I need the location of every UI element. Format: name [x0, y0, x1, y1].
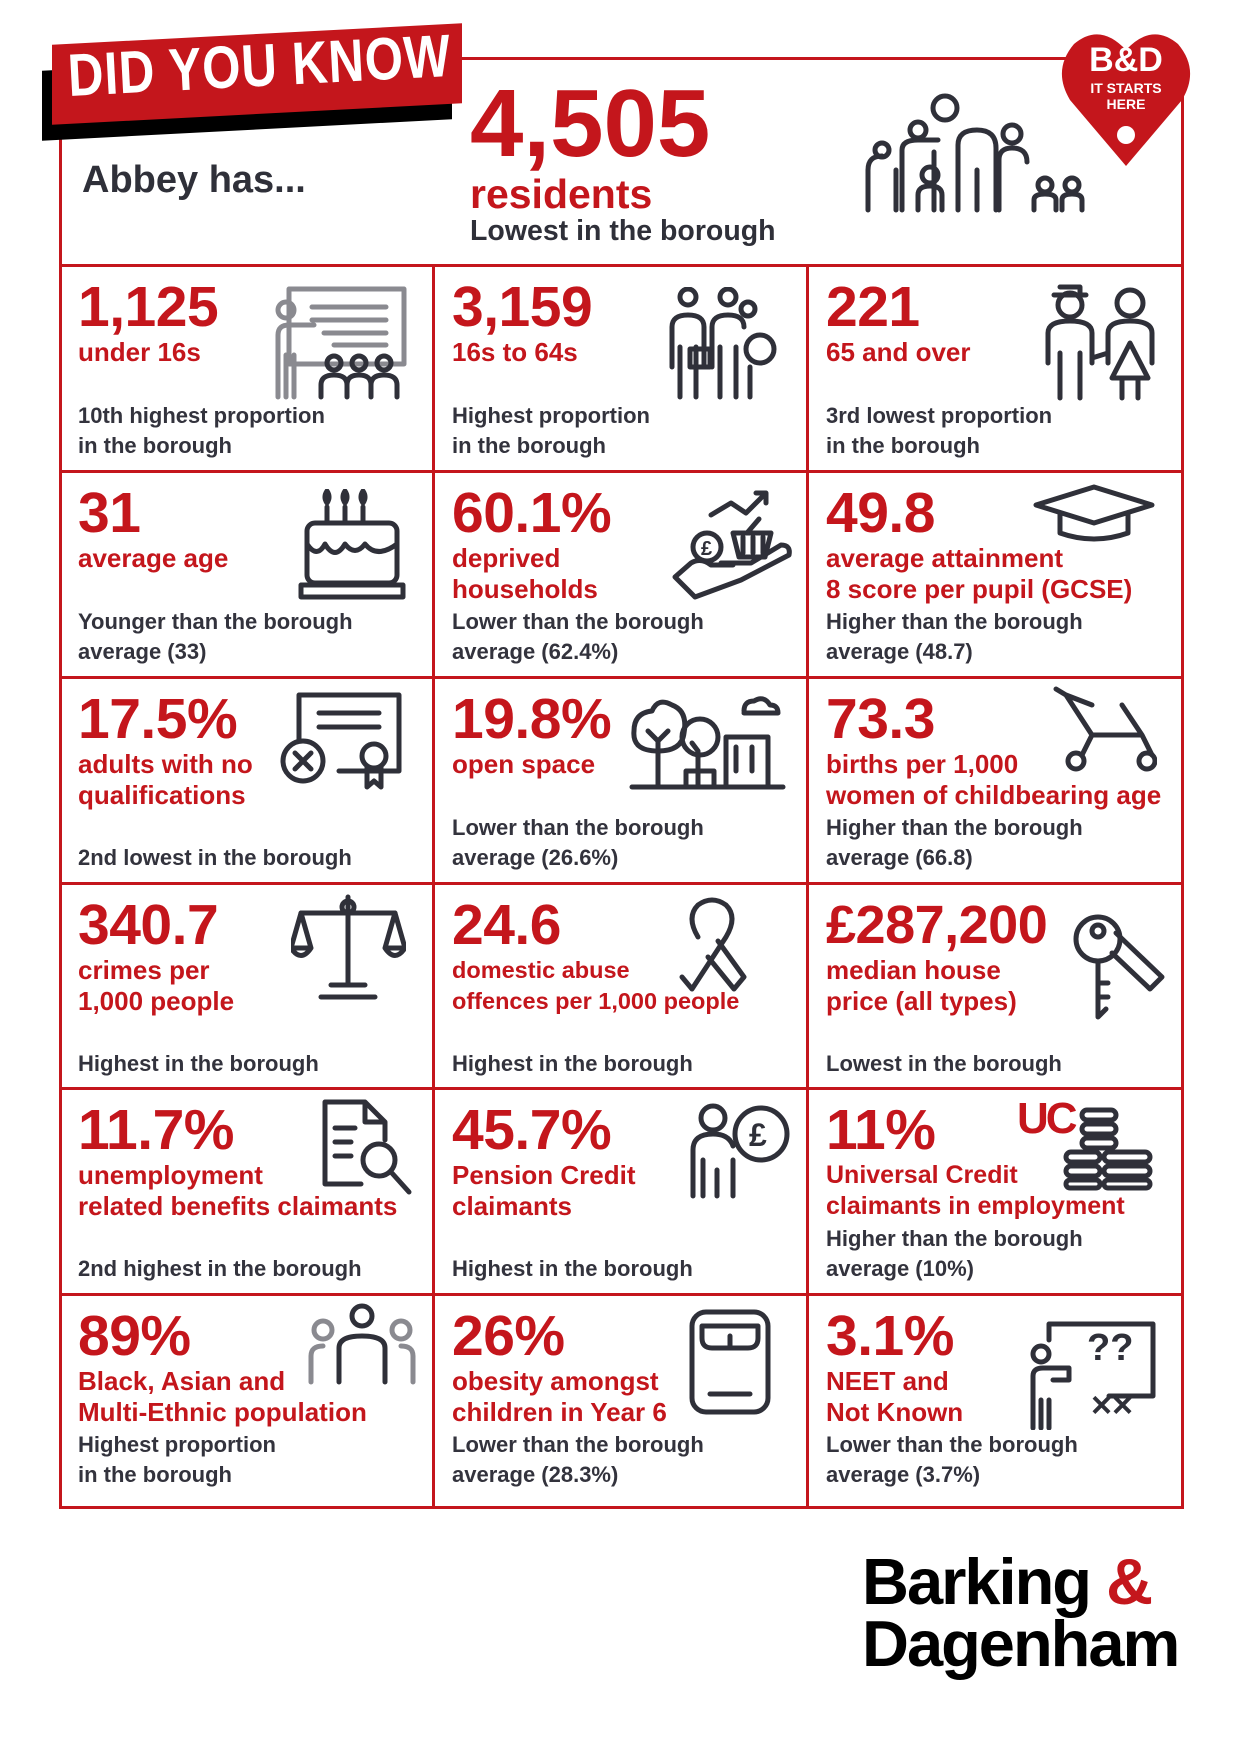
grid lines: [62, 264, 1181, 1506]
panel: domestic abuse: offences per 1,000 people: [452, 988, 739, 1014]
panel: average age: [78, 481, 406, 664]
panel: domestic abuse: [452, 893, 746, 1076]
panel: under 16s: 10th highest proportion: [78, 403, 325, 428]
icon: family group: [866, 94, 1084, 212]
panel: open space: 19.8%: [452, 687, 611, 751]
panel: under 16s: in the borough: [78, 433, 232, 458]
panel: 65 and over: in the borough: [826, 433, 980, 458]
panel: ethnic population: in the borough: [78, 1462, 232, 1487]
logo: B&D heart: HERE: [1107, 96, 1145, 112]
panel: 16s to 64s: 3,159: [452, 275, 592, 339]
panel: universal credit: claimants in employment: [826, 1192, 1125, 1220]
panel: open space: Lower than the borough: [452, 815, 704, 840]
panel: average age: average (33): [78, 639, 206, 664]
icon: hand with money basket: [672, 490, 792, 600]
panel: 16s to 64s: 16s to 64s: [452, 337, 578, 367]
icon: group of people: [308, 1304, 416, 1384]
panel: crimes: [78, 893, 406, 1076]
panel: child obesity: Lower than the borough: [452, 1432, 704, 1457]
panel: unemployment benefits: related benefits claimants: [78, 1191, 397, 1221]
icon: keys: [1074, 914, 1164, 1020]
logo: Barking & Dagenham: Dagenham: [862, 1607, 1178, 1680]
icon: birthday cake: [298, 489, 406, 600]
logo: B&D heart: IT STARTS: [1090, 80, 1162, 96]
panel: crimes: Highest in the borough: [78, 1051, 319, 1076]
icon: UC coins: UC: [1017, 1094, 1075, 1143]
panel: universal credit: average (10%): [826, 1256, 974, 1281]
subtitle: Abbey has...: Abbey has...: [82, 159, 306, 201]
panel: NEET: Not Known: [826, 1397, 963, 1427]
panel: universal credit: Universal Credit: [826, 1161, 1018, 1189]
panel: NEET: Lower than the borough: [826, 1432, 1078, 1457]
logo: B&D heart: [1062, 34, 1190, 166]
icon: teacher with question marks: ××: [1091, 1384, 1133, 1425]
icon: UC coins: [1017, 1094, 1152, 1190]
panel: NEET: average (3.7%): [826, 1462, 980, 1487]
panel: deprived households: [452, 481, 792, 664]
panel: births: 73.3: [826, 687, 935, 751]
panel: 16s to 64s: Highest proportion: [452, 403, 650, 428]
icon: elderly couple: [1046, 284, 1154, 400]
panel: universal credit: Higher than the borough: [826, 1226, 1083, 1251]
logo: Barking & Dagenham: [862, 1550, 1192, 1674]
panel: ethnic population: [78, 1304, 416, 1487]
outer frame: [59, 57, 1184, 1509]
panel: births: births per 1,000: [826, 749, 1018, 779]
panel: domestic abuse: domestic abuse: [452, 957, 630, 983]
panel: ethnic population: Multi-Ethnic population: [78, 1397, 367, 1427]
panel: crimes: crimes per: [78, 955, 210, 985]
panel: universal credit: [826, 1094, 1152, 1281]
panel: pension credit: 45.7%: [452, 1098, 611, 1162]
panel: 65 and over: 65 and over: [826, 337, 971, 367]
panel: unemployment benefits: unemployment: [78, 1160, 263, 1190]
icon: park: [630, 696, 786, 790]
panel: child obesity: children in Year 6: [452, 1397, 667, 1427]
panel: average attainment: 8 score per pupil (GCSE): [826, 574, 1132, 604]
panel: 16s to 64s: [452, 275, 776, 458]
panel: deprived households: deprived: [452, 543, 560, 573]
panel: births: [826, 686, 1161, 870]
panel: adults with no qualifications: adults with no: [78, 749, 253, 779]
panel: deprived households: Lower than the borough: [452, 609, 704, 634]
panel: pension credit: Highest in the borough: [452, 1256, 693, 1281]
headline stat: residents: 4,505: [470, 70, 710, 177]
panel: pension credit: Pension Credit: [452, 1160, 635, 1190]
panel: median house price: £287,200: [826, 895, 1047, 955]
panel: average attainment: average (48.7): [826, 639, 973, 664]
panel: average age: average age: [78, 543, 228, 573]
title banner: DID YOU KNOW: [42, 22, 462, 141]
logo: Barking & Dagenham: Barking &: [862, 1545, 1151, 1618]
panel: pension credit: claimants: [452, 1191, 572, 1221]
icon: teacher with question marks: ??: [1087, 1327, 1133, 1369]
panel: child obesity: [452, 1304, 770, 1487]
panel: 16s to 64s: in the borough: [452, 433, 606, 458]
panel: median house price: price (all types): [826, 986, 1017, 1016]
icon: certificate with cross: [280, 692, 402, 790]
panel: open space: [452, 687, 786, 870]
logo: B&D heart: B&D: [1089, 41, 1163, 79]
icon: pram: [1054, 686, 1157, 772]
panel: child obesity: 26%: [452, 1304, 565, 1368]
panel: child obesity: obesity amongst: [452, 1366, 659, 1396]
panel: deprived households: average (62.4%): [452, 639, 618, 664]
title banner: DID YOU KNOW: DID YOU KNOW: [66, 22, 453, 109]
panel: ethnic population: 89%: [78, 1304, 191, 1368]
icon: elderly with pound coin: [690, 1104, 790, 1198]
panel: adults with no qualifications: 2nd lowest in the borough: [78, 845, 352, 870]
panel: 65 and over: 3rd lowest proportion: [826, 403, 1052, 428]
icon: ribbon: [680, 898, 746, 992]
panel: 65 and over: [826, 275, 1154, 458]
icon: hand with money basket: £: [701, 538, 712, 560]
icon: document with magnifier: [322, 1100, 412, 1194]
panel: NEET: NEET and: [826, 1366, 949, 1396]
panel: pension credit: [452, 1098, 790, 1281]
panel: average attainment: Higher than the borough: [826, 609, 1083, 634]
panel: crimes: 340.7: [78, 893, 218, 957]
icon: scales: [291, 894, 406, 1000]
panel: open space: average (26.6%): [452, 845, 618, 870]
panel: universal credit: 11%: [826, 1098, 935, 1162]
icon: weighing scales: [690, 1310, 770, 1414]
panel: deprived households: households: [452, 574, 598, 604]
panel: under 16s: 1,125: [78, 275, 218, 339]
panel: domestic abuse: 24.6: [452, 893, 561, 957]
icon: elderly with pound coin: £: [749, 1117, 767, 1153]
icon: graduation cap: [1034, 484, 1154, 542]
headline stat: residents: Lowest in the borough: [470, 215, 776, 247]
panel: NEET: 3.1%: [826, 1304, 954, 1368]
panel: NEET: [826, 1304, 1156, 1487]
panel: unemployment benefits: 2nd highest in the borough: [78, 1256, 362, 1281]
panel: unemployment benefits: 11.7%: [78, 1098, 234, 1162]
panel: ethnic population: Black, Asian and: [78, 1366, 285, 1396]
panel: births: average (66.8): [826, 845, 973, 870]
panel: average attainment: 49.8: [826, 481, 935, 545]
panel: average age: 31: [78, 481, 140, 545]
panel: median house price: median house: [826, 955, 1001, 985]
panel: open space: open space: [452, 749, 595, 779]
panel: under 16s: [78, 275, 406, 458]
headline stat: residents: residents: [470, 171, 652, 217]
panel: births: women of childbearing age: [826, 780, 1161, 810]
icon: adults: [670, 287, 776, 400]
panel: crimes: 1,000 people: [78, 986, 234, 1016]
icon: teacher with class: [276, 286, 406, 400]
panel: average attainment: average attainment: [826, 543, 1063, 573]
panel: domestic abuse: Highest in the borough: [452, 1051, 693, 1076]
panel: adults with no qualifications: qualifications: [78, 780, 246, 810]
panel: under 16s: under 16s: [78, 337, 201, 367]
headline stat: residents: [470, 70, 776, 247]
panel: births: Higher than the borough: [826, 815, 1083, 840]
panel: median house price: [826, 895, 1164, 1076]
panel: adults with no qualifications: 17.5%: [78, 687, 237, 751]
panel: unemployment benefits: [78, 1098, 412, 1281]
panel: child obesity: average (28.3%): [452, 1462, 618, 1487]
icon: teacher with question marks: [1029, 1320, 1159, 1430]
panel: deprived households: 60.1%: [452, 481, 611, 545]
panel: average attainment: [826, 481, 1154, 664]
panel: ethnic population: Highest proportion: [78, 1432, 276, 1457]
panel: median house price: Lowest in the borough: [826, 1051, 1062, 1076]
panel: adults with no qualifications: [78, 687, 402, 870]
panel: average age: Younger than the borough: [78, 609, 353, 634]
panel: 65 and over: 221: [826, 275, 920, 339]
